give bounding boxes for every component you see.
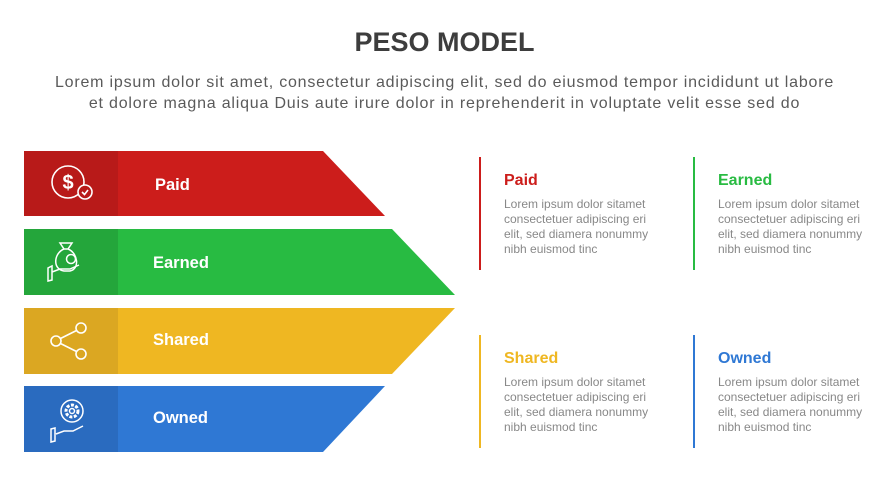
bar: paid — [24, 151, 385, 216]
subtitle — [55, 74, 834, 112]
bar labels: Paid — [155, 176, 190, 194]
subtitle: et dolore magna aliqua Duis aute irure dolor in reprehenderit in voluptate velit esse sed do — [89, 95, 800, 112]
panel: shared: Shared — [504, 350, 558, 367]
panel: owned: nibh euismod tinc — [718, 420, 811, 434]
panel: earned: nibh euismod tinc — [718, 242, 811, 256]
panel: earned: elit, sed diamera nonummy — [718, 227, 862, 241]
panel: shared — [479, 335, 674, 448]
bar: earned — [24, 229, 455, 295]
panel: paid: elit, sed diamera nonummy — [504, 227, 648, 241]
panel: paid: consectetuer adipiscing eri — [504, 212, 646, 226]
panel: earned: Lorem ipsum dolor sitamet — [718, 197, 859, 211]
title: PESO MODEL — [354, 27, 535, 57]
subtitle: Lorem ipsum dolor sit amet, consectetur adipiscing elit, sed do eiusmod tempor incididunt ut labore — [55, 74, 834, 91]
text: Earned — [153, 254, 209, 272]
panel: earned: Earned — [718, 172, 772, 189]
panel: earned: consectetuer adipiscing eri — [718, 212, 860, 226]
panel: paid — [479, 157, 674, 270]
text: Owned — [153, 409, 208, 427]
panel: shared: consectetuer adipiscing eri — [504, 390, 646, 404]
panel: shared: Lorem ipsum dolor sitamet — [504, 375, 645, 389]
panel: owned: consectetuer adipiscing eri — [718, 390, 860, 404]
panel: paid: Lorem ipsum dolor sitamet — [504, 197, 645, 211]
panel: shared: nibh euismod tinc — [504, 420, 597, 434]
panel: earned — [693, 157, 888, 270]
icon: dollar check: $ — [62, 172, 74, 194]
bar: shared — [24, 308, 455, 374]
icon: dollar check — [52, 166, 92, 199]
panel: shared: elit, sed diamera nonummy — [504, 405, 648, 419]
panel: owned: Lorem ipsum dolor sitamet — [718, 375, 859, 389]
icon: gear hand — [51, 400, 83, 442]
panel: owned — [693, 335, 888, 448]
bar: owned — [24, 386, 385, 452]
panel: owned: Owned — [718, 350, 771, 367]
panel: owned: elit, sed diamera nonummy — [718, 405, 862, 419]
icon: money bag hand — [48, 243, 79, 281]
text: Shared — [153, 331, 209, 349]
panel: paid: Paid — [504, 172, 538, 189]
panel: paid: nibh euismod tinc — [504, 242, 597, 256]
icon: share — [51, 323, 86, 359]
